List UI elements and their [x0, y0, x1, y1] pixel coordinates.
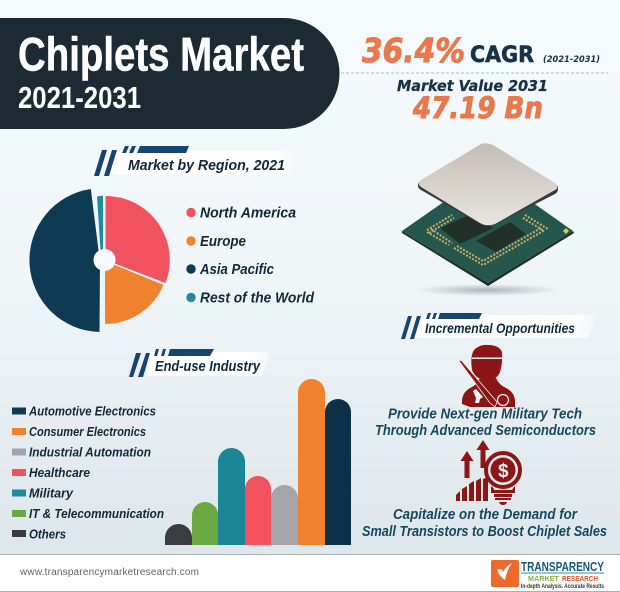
opportunity text 2: Capitalize on the Demand for: [393, 507, 578, 523]
industry legend: Industrial Automation: [29, 446, 151, 460]
market value number: 47.19 Bn: [412, 91, 543, 125]
illustration: chip: [402, 143, 574, 296]
logo: Transparency Market Research: RESEARCH: [562, 574, 598, 583]
heading: incremental opportunities: Incremental Opportunities: [425, 321, 575, 336]
heading: incremental opportunities: [401, 313, 596, 339]
industry legend: [12, 404, 164, 542]
industry legend: Others: [29, 528, 66, 542]
bar: Industrial Automation: [271, 485, 298, 545]
bar: Automotive Electronics: [325, 399, 351, 545]
opportunity text 2: [362, 507, 607, 540]
industry legend: Healthcare: [29, 466, 90, 480]
CAGR stat: CAGR: [470, 43, 534, 68]
opportunity text 1: Through Advanced Semiconductors: [375, 423, 596, 439]
industry legend: IT & Telecommunication: [29, 507, 164, 521]
title banner: [0, 18, 340, 129]
title: Chiplets Market: [18, 28, 304, 80]
bar chart: end-use industry: [165, 379, 351, 545]
icon: rising chart and dollar bulb: $: [498, 461, 509, 482]
pie legend: North America: [200, 204, 296, 222]
opportunity text 1: [375, 406, 596, 439]
pie legend: [186, 204, 315, 306]
slice: Europe: [105, 261, 164, 324]
market value label: Market Value 2031: [397, 77, 548, 95]
logo: Transparency Market Research: MARKET: [528, 574, 559, 583]
CAGR stat: 36.4%: [362, 31, 465, 70]
bar: Others: [165, 524, 192, 545]
bar: IT & Telecommunication: [192, 502, 218, 545]
heading: end-use industry: [129, 349, 270, 377]
CAGR stat: [362, 31, 600, 70]
industry legend: Military: [29, 486, 74, 500]
bar: Consumer Electronics: [298, 379, 325, 545]
subtitle years: 2021-2031: [18, 80, 141, 115]
bar: Military: [218, 448, 245, 545]
logo: Transparency Market Research: In-depth Analysis. Accurate Results: [521, 584, 605, 590]
icon: rising chart and dollar bulb: [456, 440, 520, 505]
heading: market by region: [94, 146, 300, 176]
heading: end-use industry: End-use Industry: [155, 359, 261, 375]
heading: market by region: Market by Region, 2021: [128, 158, 285, 174]
icon: soldier: [459, 345, 515, 407]
industry legend: Consumer Electronics: [29, 425, 146, 439]
slice: Asia Pacific: [29, 189, 100, 332]
slice: Rest of the World: [97, 196, 103, 258]
opportunity text 1: Provide Next-gen Military Tech: [388, 406, 582, 422]
pie legend: Europe: [200, 233, 246, 250]
logo: Transparency Market Research: [491, 559, 605, 590]
pie chart: market by region: [29, 189, 170, 332]
pie legend: Asia Pacific: [199, 261, 275, 278]
CAGR stat: (2021-2031): [543, 55, 600, 65]
industry legend: Automotive Electronics: [28, 404, 156, 418]
bar: Healthcare: [245, 476, 271, 545]
slice: North America: [106, 196, 170, 283]
pie legend: Rest of the World: [200, 290, 315, 306]
footer url: www.transparencymarketresearch.com: [19, 567, 199, 578]
